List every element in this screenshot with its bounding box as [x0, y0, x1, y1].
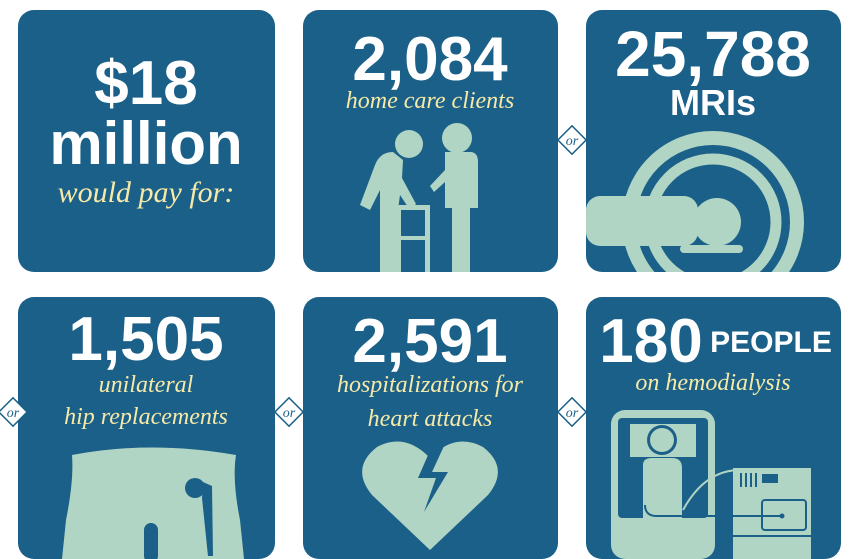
icon: or diamond row1: or — [566, 134, 579, 149]
number: 1,505: 1,505 — [68, 305, 224, 374]
icon: patient with dialysis machine — [611, 410, 811, 559]
text: hospitalizations for heart attacks: hospitalizations for — [337, 372, 524, 398]
text: MRIs: MRIs — [670, 82, 756, 123]
number: 2,084: 2,084 — [352, 25, 508, 94]
panel: MRIs — [586, 10, 841, 272]
number: 2,591: 2,591 — [352, 307, 508, 376]
icon: hips with implant — [62, 448, 244, 559]
icon: or diamond row2 middle: or — [283, 406, 296, 421]
heading: $18 million: $18 — [94, 49, 198, 118]
panel: $18 million — [18, 10, 275, 272]
icon: broken heart — [362, 442, 498, 550]
number: 25,788: 25,788 — [615, 18, 811, 90]
panel: hip replacements: hip replacements — [64, 404, 228, 430]
text: on hemodialysis: on hemodialysis — [635, 370, 791, 396]
text: million: million — [49, 110, 243, 177]
text: unilateral hip replacements: unilateral — [99, 372, 194, 398]
icon: or diamond row2 right — [558, 398, 586, 426]
panel: heart attacks — [303, 297, 558, 559]
icon: MRI scanner — [586, 131, 804, 272]
icon: elderly with walker and caregiver — [360, 123, 478, 272]
icon: or diamond row2 middle — [275, 398, 303, 426]
icon: or diamond row1 — [558, 126, 586, 154]
number: 180 PEOPLE: 180 — [599, 307, 703, 376]
text: would pay for: would pay for: — [58, 176, 234, 209]
panel: hemodialysis: PEOPLE — [710, 326, 832, 359]
panel: heart attacks: heart attacks — [368, 406, 492, 432]
panel: hemodialysis — [586, 297, 841, 559]
panel: home care clients — [303, 10, 558, 272]
icon: or diamond row2 left: or — [7, 406, 20, 421]
icon: or diamond row2 left — [0, 398, 27, 426]
icon: or diamond row2 right: or — [566, 406, 579, 421]
text: home care clients: home care clients — [346, 88, 514, 114]
panel: hip replacements — [18, 297, 275, 559]
